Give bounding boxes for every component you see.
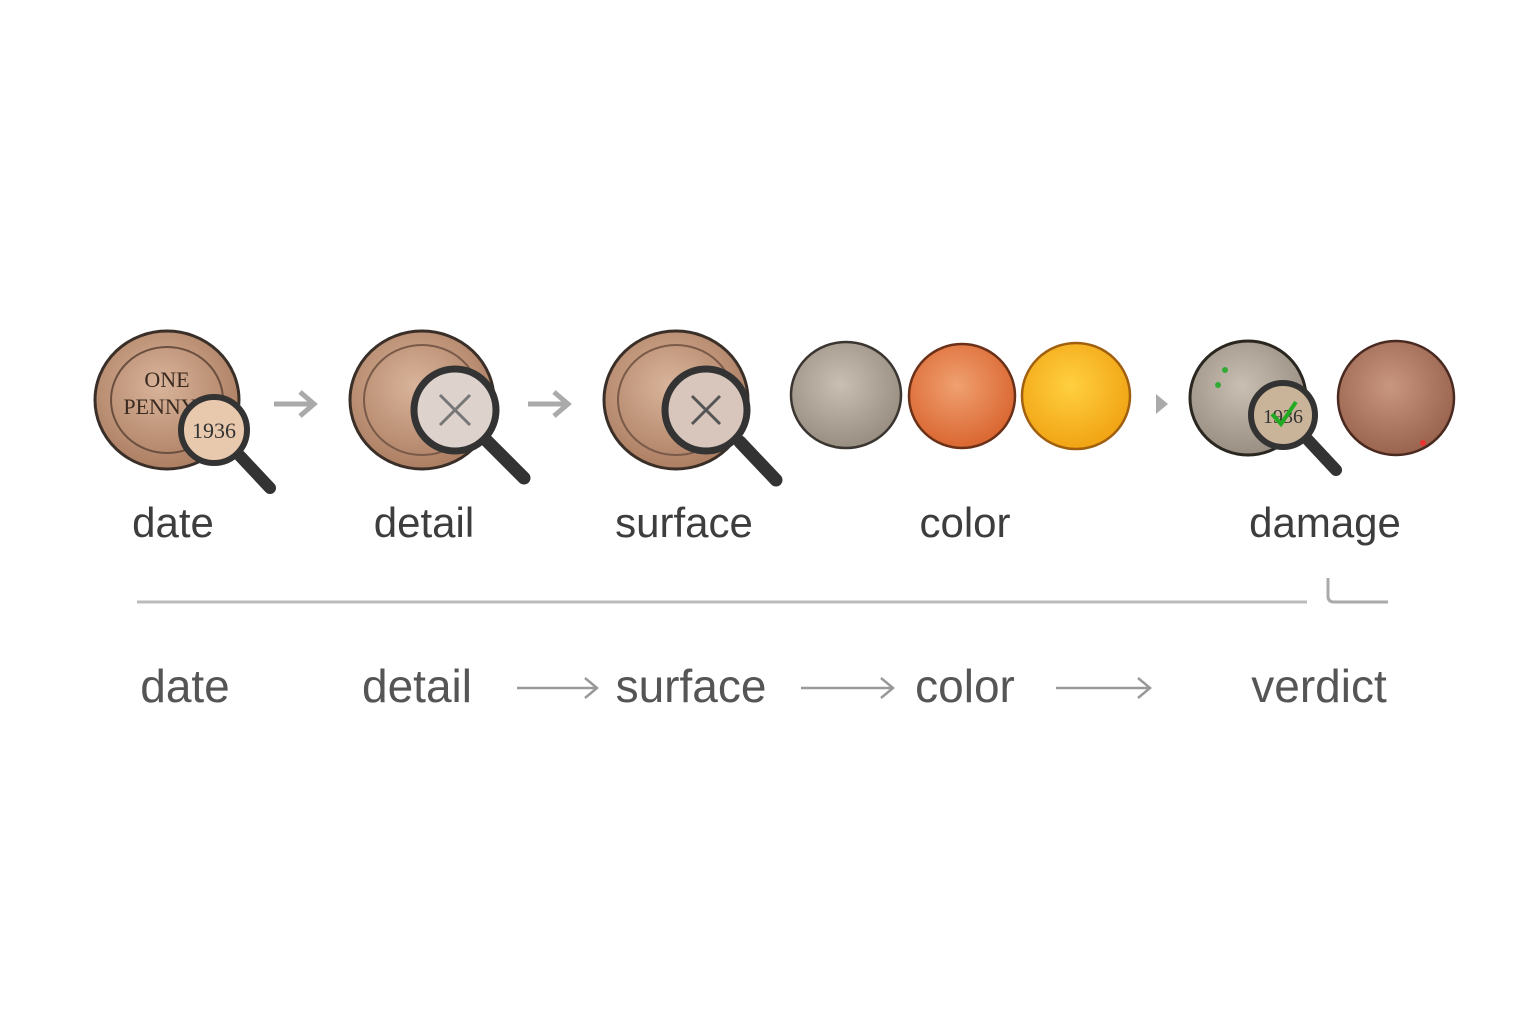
labels top: color: [919, 499, 1011, 546]
coin: surface: [604, 331, 748, 469]
labels bottom: color: [915, 660, 1015, 712]
arrow 3: [1156, 394, 1168, 414]
coin: damage: [1190, 341, 1306, 455]
labels bottom: date: [140, 660, 230, 712]
labels top: [132, 499, 1401, 546]
timeline line: [137, 578, 1388, 602]
coin: date: PENNY: [123, 394, 197, 419]
coins: color: [791, 342, 1130, 449]
arrow 1: [274, 392, 314, 416]
coin: date: ONE: [144, 367, 190, 392]
labels top: surface: [615, 499, 753, 546]
labels bottom: detail: [362, 660, 472, 712]
magnifier: damage: 1936: [1263, 406, 1303, 428]
labels bottom: [140, 660, 1387, 712]
labels top: date: [132, 499, 214, 546]
magnifier: detail: [414, 369, 524, 478]
labels top: detail: [374, 499, 474, 546]
magnifier: surface: [665, 369, 776, 480]
magnifier: date: 1936: [192, 418, 236, 443]
coin: date: [95, 331, 239, 469]
flow arrows: [517, 678, 1150, 698]
arrow 2: [528, 392, 568, 416]
coin: copper: [1338, 341, 1454, 455]
magnifier: date: [181, 397, 270, 488]
labels bottom: surface: [616, 660, 766, 712]
labels bottom: verdict: [1251, 660, 1387, 712]
coin: detail: [350, 331, 494, 469]
labels top: damage: [1249, 499, 1401, 546]
magnifier: damage: [1251, 383, 1336, 470]
